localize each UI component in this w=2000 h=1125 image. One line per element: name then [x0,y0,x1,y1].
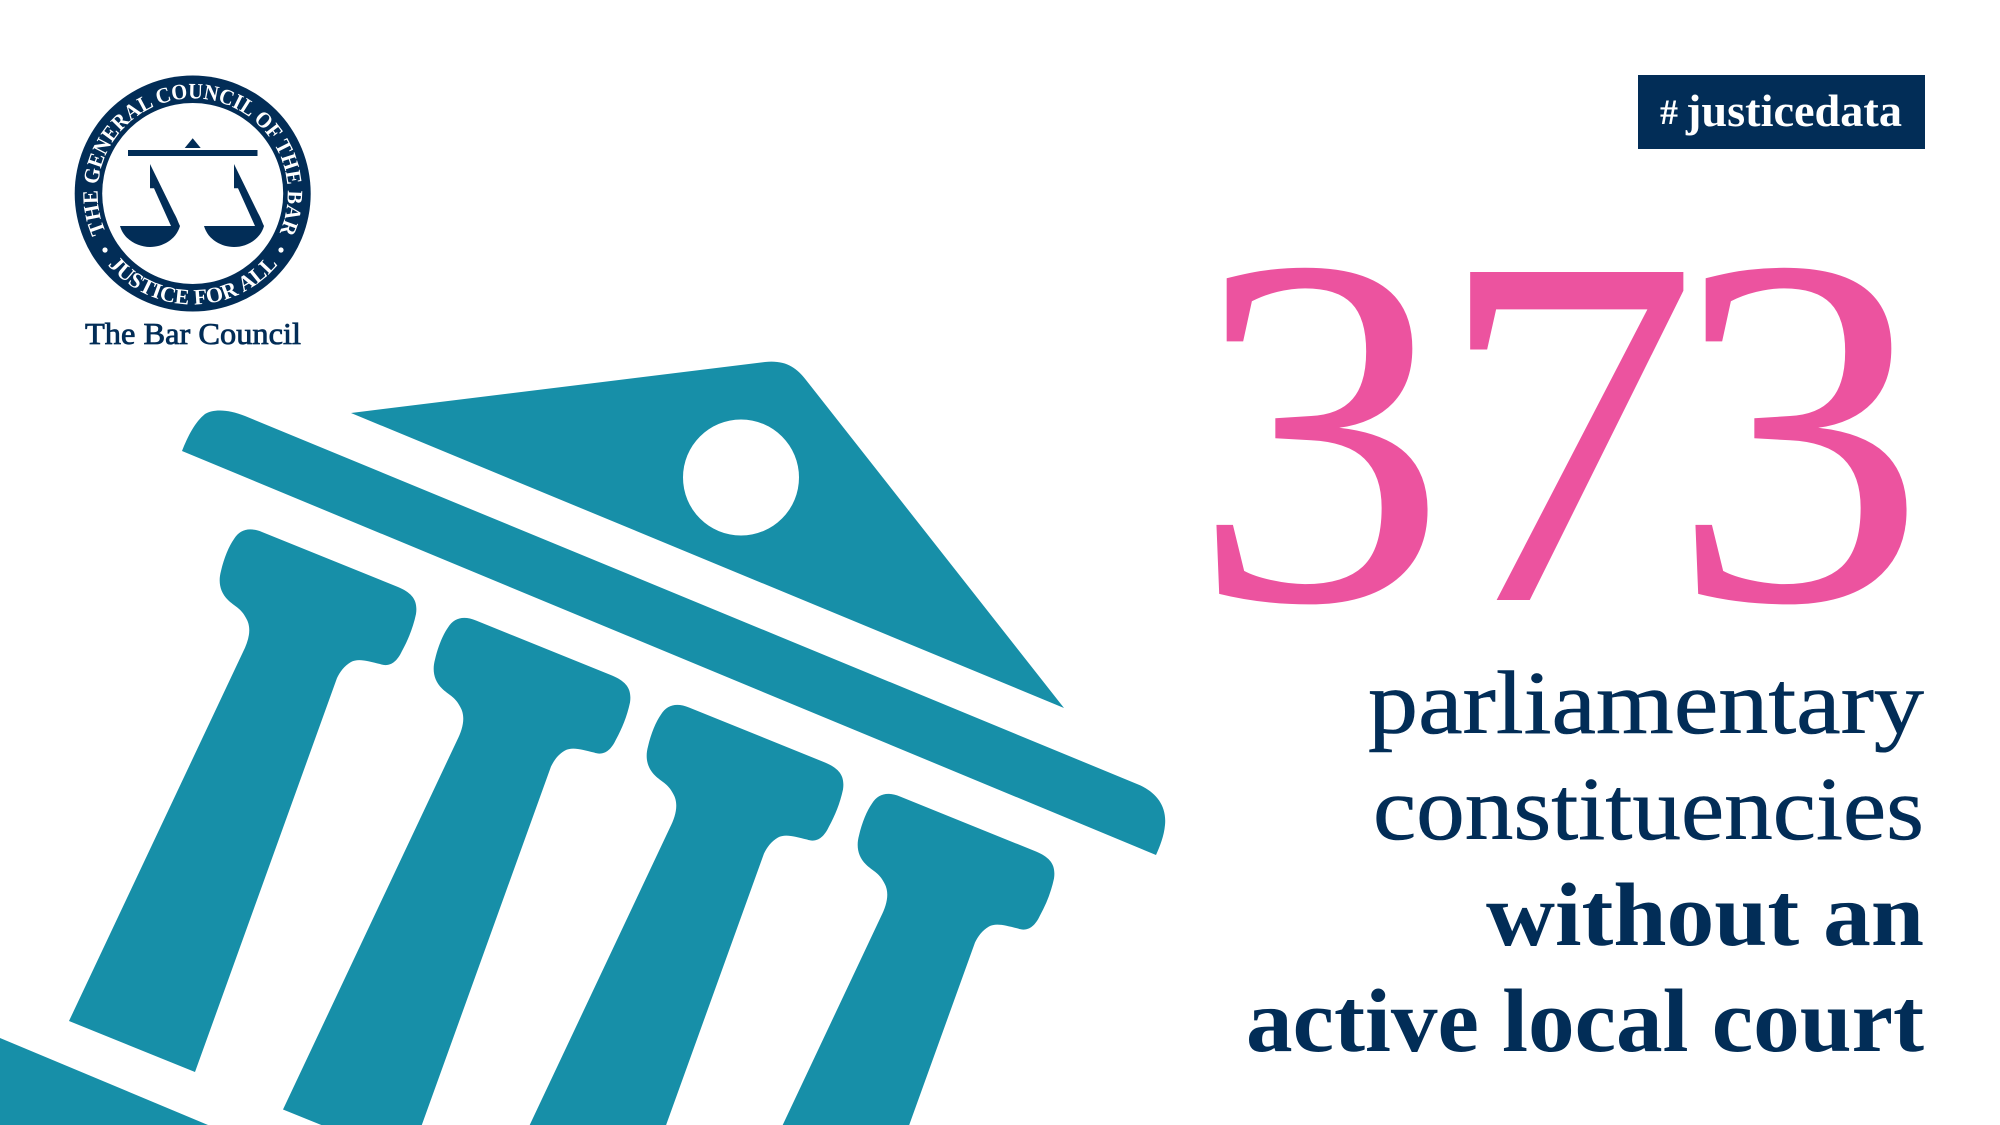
big number 373: 3 [1671,154,1927,708]
logo: General Council of the Bar seal [74,76,311,351]
seal text: the general council of the bar: THE GENERAL COUNCIL OF THE BAR [83,84,302,237]
big number 373: 7 [1436,154,1699,709]
column 3 [530,705,843,1125]
icon: tilted courthouse [0,362,1165,1125]
hashtag badge: justicedata [1685,86,1902,136]
roof circle [683,420,799,536]
big number 373 [1192,154,1927,709]
seal text: justice for all: JUSTICE FOR ALL [108,258,278,305]
line: active local court: active local court [1246,972,1924,1071]
column 2 [283,618,630,1125]
courthouse roof [351,362,1064,708]
statement text [1246,654,1924,1071]
column 1 [69,529,416,1072]
courthouse base [0,1038,208,1125]
big number 373: 3 [1192,154,1448,708]
line: without an: without an [1486,866,1924,965]
courthouse beam [182,410,1165,855]
line: constituencies: constituencies [1373,760,1924,859]
line: parliamentary: parliamentary [1368,654,1924,753]
icon: scales of justice [120,138,264,247]
logo wordmark: The Bar Council [85,316,301,351]
hashtag badge: # [1660,92,1678,132]
seal ring [75,76,311,312]
column 4 [783,794,1054,1125]
hashtag badge [1638,75,1925,149]
seal dots [102,247,284,253]
